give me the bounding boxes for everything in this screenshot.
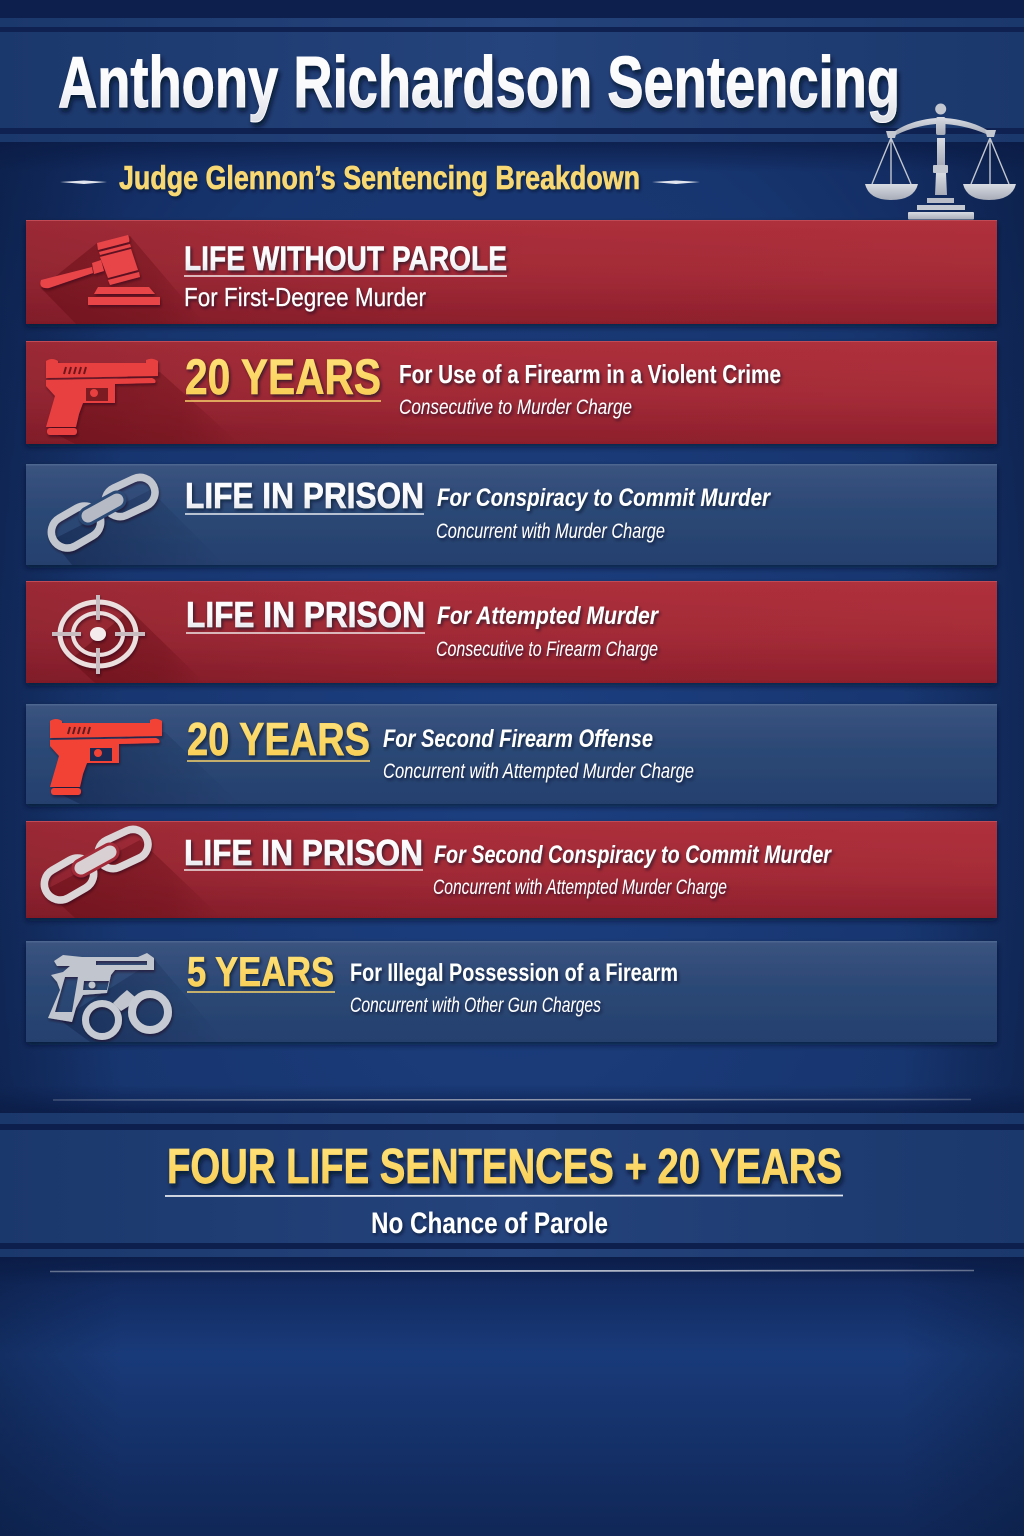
- relation: Concurrent with Murder Charge: [436, 520, 665, 543]
- panel: life in prison conspiracy: [26, 464, 997, 565]
- panel: 5 years illegal possession: [26, 941, 997, 1042]
- sentence heading: LIFE WITHOUT PAROLE: [184, 240, 507, 278]
- icon: crosshair target: [52, 595, 181, 683]
- icon: gavel: [40, 235, 178, 324]
- panel: 20 years firearm: [26, 341, 997, 444]
- icon: scales of justice: [865, 104, 1016, 220]
- summary banner: [0, 1085, 1024, 1285]
- panel: life without parole: [26, 220, 997, 324]
- sentence heading: 20 YEARS: [187, 713, 370, 765]
- icon: red handgun: [46, 358, 208, 444]
- relation: Concurrent with Attempted Murder Charge: [383, 760, 694, 783]
- sentence heading: LIFE IN PRISON: [185, 475, 424, 516]
- summary total: FOUR LIFE SENTENCES + 20 YEARS: [167, 1140, 842, 1194]
- icon: red handgun: [50, 718, 176, 804]
- subtitle with side rules: Judge Glennon’s Sentencing Breakdown: [119, 159, 640, 196]
- sentence heading: 20 YEARS: [185, 349, 381, 405]
- lower divider: [50, 1270, 974, 1272]
- sentence heading: LIFE IN PRISON: [184, 832, 423, 873]
- panel: 20 years second firearm: [26, 704, 997, 804]
- charge: For Use of a Firearm in a Violent Crime: [399, 359, 781, 389]
- charge: For Conspiracy to Commit Murder: [437, 484, 771, 512]
- icon: chain link: [48, 474, 166, 565]
- relation: Concurrent with Attempted Murder Charge: [433, 876, 727, 899]
- charge: For Attempted Murder: [437, 602, 659, 630]
- charge: For First-Degree Murder: [184, 282, 426, 312]
- panel: life in prison second conspiracy: [26, 821, 997, 918]
- panel: life in prison attempted murder: [26, 581, 997, 683]
- charge: For Second Conspiracy to Commit Murder: [434, 841, 832, 869]
- charge: For Second Firearm Offense: [383, 725, 653, 753]
- sentence heading: LIFE IN PRISON: [186, 594, 425, 635]
- icon: pistol and handcuffs: [48, 953, 176, 1042]
- relation: Concurrent with Other Gun Charges: [350, 994, 601, 1017]
- sentence heading: 5 YEARS: [187, 948, 334, 995]
- icon: chain link: [40, 826, 193, 918]
- header banner: [0, 0, 1024, 172]
- relation: Consecutive to Murder Charge: [399, 396, 632, 419]
- charge: For Illegal Possession of a Firearm: [350, 959, 678, 987]
- relation: Consecutive to Firearm Charge: [436, 638, 658, 661]
- upper divider: [53, 1098, 971, 1101]
- summary note: No Chance of Parole: [371, 1207, 608, 1240]
